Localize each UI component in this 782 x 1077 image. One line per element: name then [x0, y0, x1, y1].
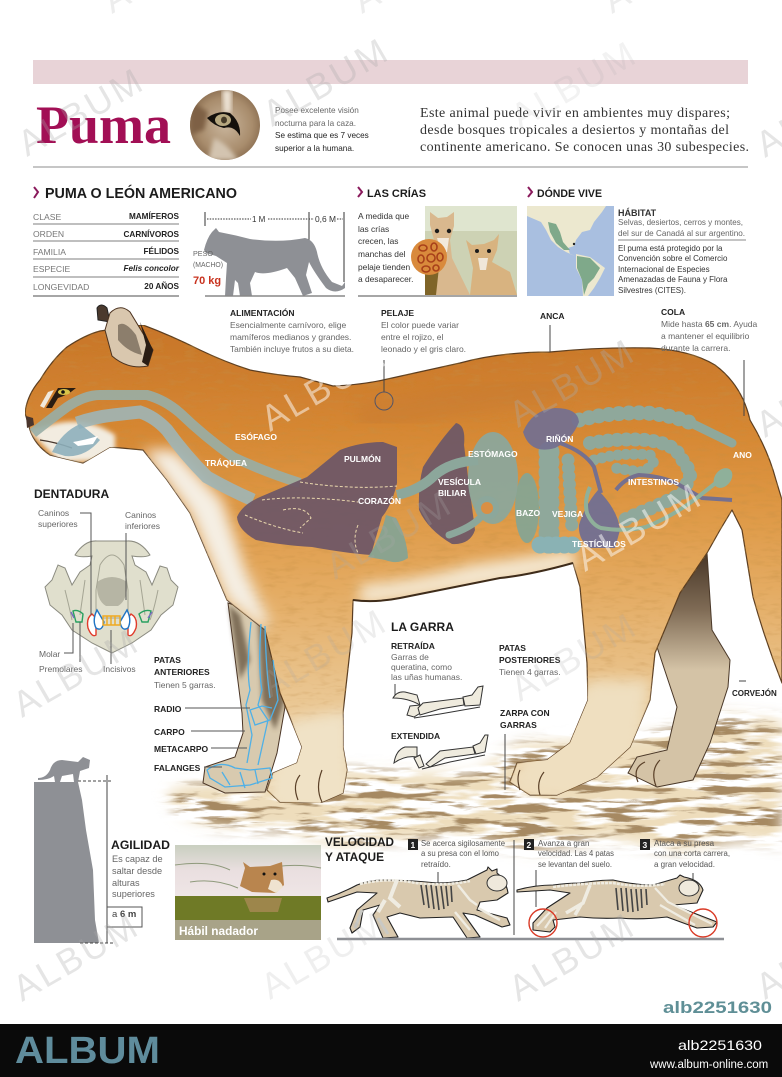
section: dentadura: Caninos [38, 508, 69, 518]
taxonomy table: CARNÍVOROS [124, 229, 180, 239]
watermarks: ALBUM [504, 32, 644, 137]
step 2: 2 [526, 840, 532, 850]
far front leg shadow [229, 605, 285, 730]
silhouette [204, 228, 345, 296]
callout: zarpa con garras: GARRAS [500, 720, 537, 730]
organ labels: RIÑÓN [546, 433, 573, 444]
step 1: Se acerca sigilosamente [421, 839, 506, 848]
section: la garra: Garras de [391, 652, 429, 662]
organ labels: ESÓFAGO [235, 431, 277, 442]
callout: patas anteriores: CARPO [154, 727, 185, 737]
taxonomy table: 20 AÑOS [144, 281, 180, 291]
callout: cola [661, 307, 758, 416]
cat on cliff [38, 757, 90, 782]
body [25, 325, 782, 803]
section: las crías [358, 187, 517, 296]
section: la garra: EXTENDIDA [391, 731, 440, 741]
step 2 [524, 839, 614, 869]
organ labels [205, 431, 752, 549]
callout: anca: ANCA [540, 311, 565, 321]
taxonomy table: FÉLIDOS [144, 246, 180, 256]
inset: fur spots [411, 239, 447, 275]
weight [193, 249, 223, 287]
eye caption: nocturna para la caza. [275, 119, 356, 128]
text: pelaje tienden [358, 262, 410, 272]
photo: cubs [411, 206, 517, 295]
near ear [105, 308, 153, 367]
callout: corvejón: CORVEJÓN [732, 689, 777, 698]
watermarks: ALBUM [6, 620, 146, 725]
kidney [523, 408, 601, 493]
watermarks: ALBUM [504, 604, 644, 709]
liver [419, 423, 475, 544]
weight: PESO [193, 249, 213, 258]
eye caption: Se estima que es 7 veces [275, 131, 369, 140]
callout: cola: COLA [661, 307, 685, 317]
habitat text: del sur de Canadá al sur argentino. [618, 229, 745, 238]
step 3: 3 [642, 840, 648, 850]
callout: patas posteriores [499, 643, 561, 677]
far hind leg [628, 553, 730, 787]
organ labels: BILIAR [438, 488, 466, 498]
teeth [71, 610, 152, 636]
esophagus [33, 395, 300, 483]
watermarks: ALBUM [256, 29, 396, 134]
habitat text [618, 208, 746, 295]
section: dentadura: DENTADURA [34, 487, 109, 501]
habitat text: HÁBITAT [618, 208, 657, 218]
taxonomy table: CLASE [33, 212, 61, 222]
section: velocidad y ataque [325, 835, 730, 939]
section: agilidad: saltar desde [112, 866, 162, 876]
watermarks: ALBUM [11, 59, 151, 164]
organ labels: ANO [733, 450, 752, 460]
taxonomy table: LONGEVIDAD [33, 282, 89, 292]
text: A medida que [358, 211, 410, 221]
taxonomy table: MAMÍFEROS [129, 211, 180, 221]
organ labels: CORAZÓN [358, 495, 401, 506]
callout: anca [540, 311, 565, 352]
step 3 [640, 839, 730, 869]
heading: LAS CRÍAS [367, 187, 426, 200]
watermarks: ALBUM [254, 334, 394, 439]
section: agilidad: Es capaz de [112, 854, 163, 864]
text: las crías [358, 224, 389, 234]
text: manchas del [358, 249, 406, 259]
top banner [33, 60, 748, 84]
far ear [97, 305, 110, 322]
intro text: continente americano. Se conocen unas 30 subespecies. [420, 140, 749, 155]
callout: pelaje: entre el rojizo, el [381, 332, 443, 342]
text [358, 211, 413, 284]
section: la garra: RETRAÍDA [391, 641, 435, 651]
cliff [34, 782, 99, 943]
trachea [52, 412, 253, 500]
taxonomy table: ORDEN [33, 229, 64, 239]
running skeleton 1 [327, 867, 510, 938]
step 1: 1 [410, 840, 416, 850]
callout: zarpa con garras: ZARPA CON [500, 708, 550, 718]
pale fur overlays [28, 385, 650, 810]
section: agilidad: AGILIDAD [111, 838, 170, 852]
callout: patas posteriores: POSTERIORES [499, 655, 561, 665]
organ labels: TRÁQUEA [205, 458, 247, 468]
footer bar [0, 1024, 782, 1077]
callout: patas posteriores: Tienen 4 garras. [499, 667, 561, 677]
claw extended [394, 735, 488, 769]
section: la garra: las uñas humanas. [391, 672, 462, 682]
step 2: Avanza a gran [538, 839, 589, 848]
section: puma o león americano [33, 184, 345, 296]
callout: pelaje: El color puede variar [381, 320, 459, 330]
callout: alimentación [230, 307, 354, 354]
organ labels: ESTÓMAGO [468, 448, 518, 459]
taxonomy table: ESPECIE [33, 264, 71, 274]
callout: alimentación: mamíferos medianos y grandes. [230, 332, 351, 342]
watermarks: ALBUM [502, 904, 642, 1009]
far front leg [203, 603, 285, 793]
callout: patas posteriores: PATAS [499, 643, 526, 653]
section: dentadura: Premolares [39, 664, 82, 674]
image id: alb2251630 [663, 998, 772, 1017]
eye caption: Posee excelente visión [275, 106, 359, 115]
intro text [420, 106, 749, 155]
taxonomy table: Felis concolor [123, 264, 180, 273]
watermarks: ALBUM [6, 904, 146, 1009]
intro text: desde bosques tropicales a desiertos y montañas del [420, 123, 729, 138]
section: agilidad [34, 757, 170, 943]
lower lobe [368, 515, 408, 562]
puma illustration [25, 305, 782, 810]
section: velocidad y ataque: VELOCIDAD [325, 835, 394, 849]
step 3: Ataca a su presa [654, 839, 715, 848]
taxonomy table [33, 211, 180, 296]
eye caption: superior a la humana. [275, 144, 354, 153]
habitat text: Internacional de Especies [618, 265, 710, 274]
bladder and testicles [579, 464, 736, 548]
callout: zarpa con garras [500, 708, 550, 790]
taxonomy table: FAMILIA [33, 247, 66, 257]
callout: cola: durante la carrera. [661, 343, 730, 353]
callout: patas anteriores: PATAS [154, 655, 181, 665]
callout: cola: a mantener el equilibrio [661, 331, 750, 341]
habitat text: El puma está protegido por la [618, 244, 723, 253]
callout: alimentación: ALIMENTACIÓN [230, 307, 295, 318]
habitat text: Amenazadas de Fauna y Flora [618, 275, 728, 284]
habitat text: Silvestres (CITES). [618, 286, 686, 295]
photo: swimming puma [175, 845, 321, 940]
internal organs [33, 395, 736, 788]
ground [165, 715, 782, 852]
step 2: velocidad. Las 4 patas [538, 849, 614, 858]
callout: pelaje [375, 308, 466, 410]
size scale: 0,6 M [315, 215, 336, 224]
callout: patas anteriores: METACARPO [154, 744, 209, 754]
photo: swimming puma: Hábil nadador [179, 924, 258, 938]
heading: DÓNDE VIVE [537, 187, 602, 200]
step 1: retraído. [421, 860, 451, 869]
photo: puma eye [190, 90, 260, 160]
intro text: Este animal puede vivir en ambientes muy dispares; [420, 106, 730, 121]
habitat text: Convención sobre el Comercio [618, 254, 728, 263]
text: a desaparecer. [358, 274, 413, 284]
section: dentadura: superiores [38, 519, 78, 529]
heading: PUMA O LEÓN AMERICANO [45, 184, 237, 202]
eye [40, 388, 76, 408]
step 1 [408, 839, 506, 869]
paw details [295, 760, 660, 802]
callout: patas anteriores: RADIO [154, 704, 182, 714]
step 1: a su presa con el lomo [421, 849, 500, 858]
weight: 70 kg [193, 275, 221, 287]
section: dentadura: inferiores [125, 521, 160, 531]
weight: (MACHO) [193, 260, 223, 269]
watermarks: ALBUM [502, 330, 642, 435]
step 2: se levantan del suelo. [538, 860, 612, 869]
red circles [529, 909, 717, 937]
skull [45, 541, 178, 653]
section: dentadura: Molar [39, 649, 60, 659]
section: dentadura: Incisivos [103, 664, 136, 674]
watermarks: ALBUM [568, 474, 709, 579]
organ labels: TESTÍCULOS [572, 539, 626, 549]
watermarks: ALBUM [254, 600, 394, 705]
section: agilidad: alturas [112, 878, 140, 888]
text: crecen, las [358, 236, 398, 246]
claw retracted [393, 686, 483, 718]
footer bar: www.album-online.com [649, 1059, 768, 1071]
callout: patas anteriores: Tienen 5 garras. [154, 680, 216, 690]
step 3: con una corta carrera, [654, 849, 730, 858]
callout: cola: Mide hasta 65 cm. Ayuda [661, 319, 758, 329]
footer bar: ALBUM [15, 1030, 160, 1072]
organ labels: PULMÓN [344, 453, 381, 464]
section: dentadura [34, 487, 178, 674]
watermarks: ALBUM [318, 482, 459, 587]
organ labels: BAZO [516, 508, 540, 518]
map [527, 206, 614, 296]
section: la garra: queratina, como [391, 662, 452, 672]
watermarks: ALBUM [254, 902, 394, 1007]
organ labels: INTESTINOS [628, 477, 679, 487]
section: velocidad y ataque: Y ATAQUE [325, 850, 384, 864]
section: dentadura: Caninos [125, 510, 156, 520]
spleen [515, 473, 539, 543]
section: la garra: LA GARRA [391, 620, 454, 634]
callout: pelaje: leonado y el gris claro. [381, 344, 466, 354]
title: Puma [36, 95, 171, 155]
running skeleton 2 [517, 875, 717, 932]
section: dónde vive [527, 187, 746, 296]
lung and heart [237, 442, 397, 555]
section: agilidad: superiores [112, 889, 155, 899]
step 3: a gran velocidad. [654, 860, 715, 869]
callout: patas anteriores: ANTERIORES [154, 667, 210, 677]
section: la garra [391, 620, 488, 769]
forelimb bones [207, 622, 278, 788]
organ labels: VEJIGA [552, 509, 583, 519]
stomach [397, 432, 518, 535]
footer bar: alb2251630 [678, 1037, 762, 1053]
section: agilidad: a 6 m [112, 909, 136, 920]
callout: pelaje: PELAJE [381, 308, 414, 318]
callout: patas anteriores: FALANGES [154, 763, 201, 773]
size scale [205, 212, 344, 282]
callout: alimentación: Esencialmente carnívoro, elige [230, 320, 347, 330]
callout: corvejón [732, 681, 777, 698]
callout: alimentación: También incluye frutos a su dieta. [230, 344, 354, 354]
habitat text: Selvas, desiertos, cerros y montes, [618, 218, 743, 227]
size scale: 1 M [252, 215, 266, 224]
eye caption [275, 106, 369, 153]
organ labels: VESÍCULA [438, 477, 481, 487]
callout: patas anteriores [154, 655, 250, 773]
intestines [540, 413, 732, 545]
